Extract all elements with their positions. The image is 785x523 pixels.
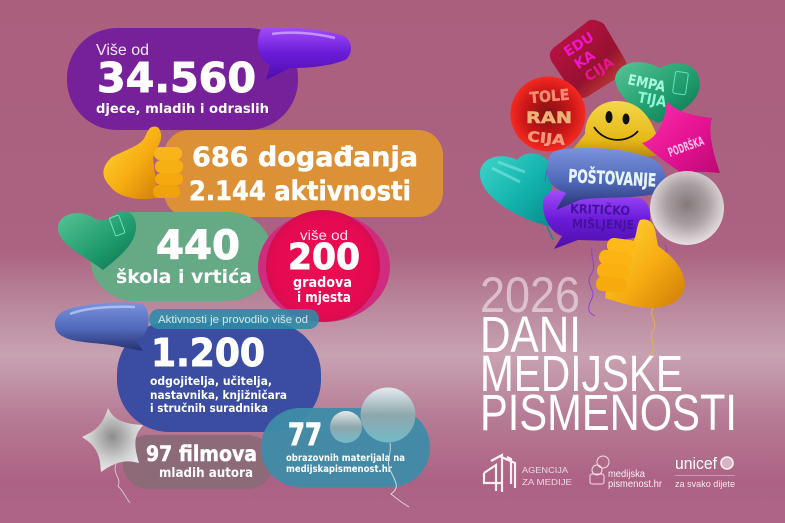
panel: cities	[258, 210, 390, 322]
title line: medijske: MEDIJSKE	[480, 345, 683, 402]
blue pill	[117, 322, 321, 432]
number: 1.200: 1.200	[151, 331, 265, 375]
icon: thumbs up balloon	[103, 126, 183, 199]
text: gradova: gradova	[293, 275, 352, 291]
balloon: edukacija: EDU	[561, 29, 597, 61]
text: mladih autora: mladih autora	[159, 465, 253, 481]
text: i mjesta: i mjesta	[297, 290, 351, 306]
number: 2.144 aktivnosti: 2.144 aktivnosti	[189, 176, 411, 207]
panel: materials	[261, 388, 430, 507]
balloon: smiley speech	[566, 101, 662, 156]
balloon: kritičko mišljenje: KRITIČKO	[570, 201, 630, 218]
balloon: poštovanje: POŠTOVANJE	[568, 165, 657, 192]
text: djece, mladih i odraslih: djece, mladih i odraslih	[96, 101, 269, 117]
text: obrazovnih materijala: medijskapismenost.hr	[286, 464, 392, 475]
panel: reach	[67, 27, 351, 130]
balloon: thumbs up	[595, 219, 685, 356]
icon: purple speech balloon	[258, 27, 351, 80]
text: obrazovnih materijala	[286, 453, 405, 475]
teal pill	[261, 408, 430, 487]
balloon: edukacija: KA	[572, 48, 599, 73]
balloon: podrška star	[642, 101, 720, 176]
balloon: tolerancija: RAN	[526, 108, 572, 127]
logo: medijska pismenost: pismenost.hr	[608, 479, 663, 490]
number: 97 filmova: 97 filmova	[146, 442, 257, 466]
balloon: kritičko mišljenje	[543, 190, 650, 249]
logo: medijska pismenost: medijska	[608, 469, 645, 480]
orange pill	[164, 130, 443, 217]
number: 34.560: 34.560	[97, 54, 256, 102]
title line: dani: DANI	[480, 306, 581, 363]
panel: films	[123, 435, 273, 489]
text: obrazovnih materijala: obrazovnih materijala na	[286, 453, 405, 464]
icon: small teal balloon	[330, 411, 362, 443]
balloon: empatija heart: TIJA	[636, 88, 668, 111]
balloon: teal heart tip	[547, 226, 553, 240]
label: aktivnosti	[149, 309, 319, 329]
text: više od: Više od	[96, 42, 149, 59]
green pill	[90, 212, 273, 301]
label: aktivnosti: Aktivnosti je provodilo više od	[158, 314, 308, 326]
grey pill	[123, 435, 273, 489]
logo: agencija za medije	[484, 455, 572, 492]
text: educators list: odgojitelja, učitelja,	[150, 374, 272, 388]
logo: agencija za medije: ZA MEDIJE	[522, 477, 572, 487]
logo: unicef	[675, 454, 735, 489]
balloon: edukacija: CIJA	[582, 55, 617, 85]
number: 440: 440	[156, 223, 240, 269]
balloon: kritičko mišljenje: MIŠLJENJE	[572, 216, 634, 232]
panel: educators	[55, 302, 321, 432]
balloon: tolerancija: TOLE	[529, 86, 570, 107]
panel: teal heart balloon backing group	[480, 153, 552, 226]
text: educators list: nastavnika, knjižničara	[150, 388, 287, 402]
number: 686 događanja: 686 događanja	[192, 142, 418, 173]
balloon: edukacija	[550, 20, 627, 98]
balloon: tolerancija: CIJA	[527, 129, 566, 149]
number: 200: 200	[288, 237, 360, 278]
balloon: silver circle	[650, 171, 724, 245]
title	[480, 267, 737, 441]
purple pill	[67, 28, 298, 130]
balloon: podrška star: PODRŠKA	[666, 133, 706, 160]
icon: large teal balloon	[360, 388, 416, 507]
logo: agencija za medije: AGENCIJA	[522, 465, 568, 475]
text: educators list: i stručnih suradnika	[150, 401, 268, 415]
logo: medijska pismenost	[590, 456, 663, 490]
logo: unicef: unicef	[675, 454, 717, 473]
red foil balloon	[266, 210, 380, 322]
balloon: tolerancija	[510, 76, 586, 152]
ribbons	[545, 153, 666, 316]
icon: blue speech balloon	[55, 302, 149, 351]
pink halo	[258, 212, 390, 322]
logo: unicef: za svako dijete	[675, 479, 735, 489]
icon: green heart balloon	[58, 211, 136, 270]
icon: silver star balloon	[82, 408, 143, 503]
balloon: poštovanje	[547, 148, 666, 210]
text: škola i vrtića: škola i vrtića	[116, 266, 252, 288]
balloon: empatija heart: EMPA	[626, 72, 667, 96]
number: 77: 77	[288, 418, 322, 453]
panel: events	[103, 126, 443, 217]
text: više od: više od	[300, 228, 348, 243]
balloon bouquet	[510, 20, 724, 356]
balloon: empatija heart	[615, 62, 700, 123]
text: educators list	[150, 374, 287, 415]
year: 2026	[480, 267, 580, 323]
panel: schools	[58, 211, 273, 301]
